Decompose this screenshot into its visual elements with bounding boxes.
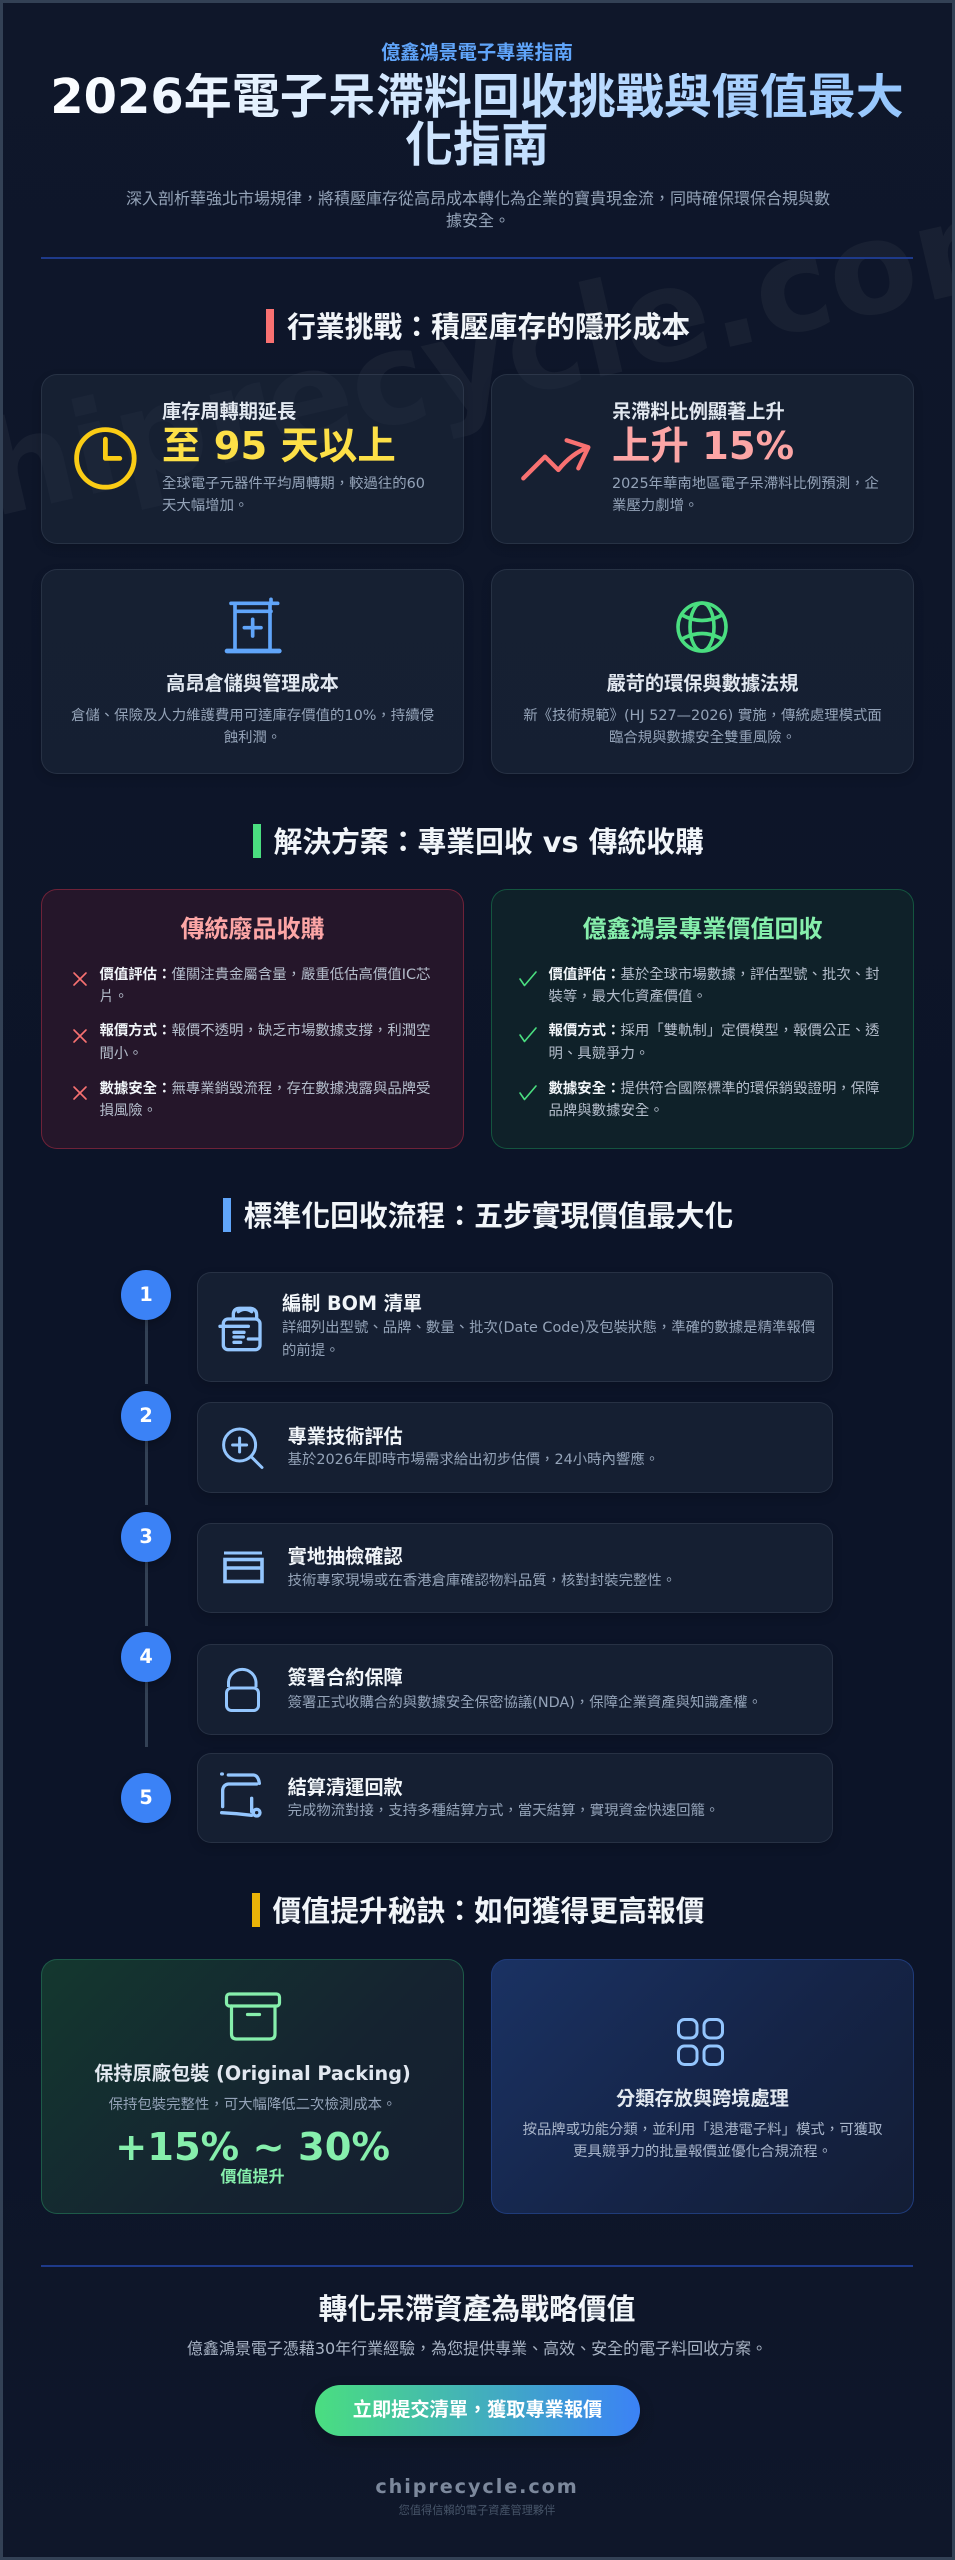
step card [197, 1402, 833, 1493]
panel: original packing [41, 1959, 464, 2214]
description [612, 476, 879, 514]
number 3 [121, 1512, 171, 1562]
heading: solution: 解決方案：專業回收 vs 傳統收購 [274, 825, 704, 859]
main title [41, 73, 913, 169]
step 2 [121, 1391, 833, 1505]
number 2: 2 [139, 1404, 153, 1427]
description: 的前提。 [282, 1343, 340, 1359]
main title: 化指南 [405, 117, 549, 173]
description: 全球電子元器件平均周轉期，較過往的60 [162, 476, 425, 492]
heading: process: 標準化回收流程：五步實現價值最大化 [244, 1199, 733, 1233]
icon: clipboard [218, 1306, 262, 1352]
title: 實地抽檢確認 [288, 1545, 403, 1568]
card: regulations [491, 569, 914, 774]
number 4 [121, 1632, 171, 1682]
title: 保持原廠包裝 (Original Packing) [94, 2062, 411, 2084]
title: 專業技術評估 [288, 1425, 403, 1448]
title: 高昂倉儲與管理成本 [166, 672, 339, 695]
button: 立即提交清單，獲取專業報價 [353, 2398, 602, 2421]
step card [197, 1753, 833, 1843]
description: 業壓力劇增。 [612, 498, 698, 514]
item: quote: 報價方式：採用「雙軌制」定價模型，報價公正、透 [548, 1023, 880, 1039]
number 4: 4 [139, 1645, 153, 1668]
step card [197, 1644, 833, 1735]
item: quote [519, 1022, 880, 1062]
item: quote: 明、具競爭力。 [548, 1046, 649, 1062]
icon: clock [74, 427, 137, 490]
card: dead stock ratio [491, 374, 914, 544]
description: 基於2026年即時市場需求給出初步估價，24小時內響應。 [288, 1452, 659, 1468]
description: 簽署正式收購合約與數據安全保密協議(NDA)，保障企業資產與知識產權。 [288, 1695, 762, 1711]
step card [197, 1523, 833, 1613]
icon: storage tray [223, 1552, 264, 1584]
number 1 [121, 1270, 171, 1320]
title: 編制 BOM 清單 [282, 1292, 422, 1315]
stat: +15% ~ 30% [115, 2125, 390, 2170]
description: 倉儲、保險及人力維護費用可達庫存價值的10%，持續侵 [71, 708, 434, 724]
site name: chiprecycle.com [375, 2475, 579, 2498]
icon: trending arrow [521, 438, 590, 480]
closing section [187, 2292, 767, 2517]
icon: lock [225, 1668, 260, 1712]
label: 呆滯料比例顯著上升 [612, 400, 785, 423]
item: quote [73, 1022, 431, 1062]
item: value: 價值評估：僅關注貴金屬含量，嚴重低估高價值IC芯 [100, 966, 430, 982]
step 4 [121, 1632, 833, 1747]
number 5 [121, 1773, 171, 1823]
closing title: 轉化呆滯資產為戰略價值 [319, 2292, 635, 2326]
description: 天大幅增加。 [162, 498, 248, 514]
description [523, 708, 882, 746]
description: 2025年華南地區電子呆滯料比例預測，企 [612, 476, 879, 492]
description [71, 708, 434, 746]
main title: 2026年電子呆滯料回收挑戰與價值最大 [50, 69, 904, 125]
description: 更具競爭力的批量報價並優化合規流程。 [573, 2144, 832, 2160]
description: 技術專家現場或在香港倉庫確認物料品質，核對封裝完整性。 [288, 1573, 676, 1589]
description: 蝕利潤。 [224, 730, 281, 746]
subtitle: 據安全。 [446, 211, 510, 230]
heading: challenges: 行業挑戰：積壓庫存的隱形成本 [287, 310, 690, 344]
item: data security: 數據安全：無專業銷毀流程，存在數據洩露與品牌受 [100, 1081, 431, 1097]
title: 簽署合約保障 [288, 1666, 403, 1689]
item: value: 片。 [100, 989, 128, 1005]
description [162, 476, 425, 514]
item: value [73, 966, 430, 1005]
icon: payment scroll [220, 1772, 262, 1818]
item: value: 價值評估：基於全球市場數據，評估型號、批次、封 [548, 966, 880, 982]
step card [197, 1272, 833, 1382]
item: data security [73, 1080, 431, 1119]
description: 臨合規與數據安全雙重風險。 [609, 730, 796, 746]
stat: 上升 15% [612, 424, 794, 469]
heading: value tips: 價值提升秘訣：如何獲得更高報價 [272, 1894, 704, 1928]
description [523, 2122, 882, 2160]
icon: grid [677, 2018, 724, 2066]
description: 新《技術規範》(HJ 527—2026) 實施，傳統處理模式面 [523, 708, 882, 724]
title: 結算清運回款 [288, 1776, 403, 1799]
subtitle [126, 189, 830, 230]
closing text: 億鑫鴻景電子憑藉30年行業經驗，為您提供專業、高效、安全的電子料回收方案。 [187, 2339, 767, 2358]
stat: 至 95 天以上 [162, 424, 396, 469]
header [50, 41, 904, 230]
item: data security: 數據安全：提供符合國際標準的環保銷毀證明，保障 [548, 1081, 880, 1097]
title: 分類存放與跨境處理 [616, 2087, 789, 2110]
panel title: 傳統廢品收購 [180, 915, 324, 943]
description: 詳細列出型號、品牌、數量、批次(Date Code)及包裝狀態，準確的數據是精準報價 [282, 1320, 815, 1336]
card: storage cost [41, 569, 464, 774]
description: 完成物流對接，支持多種結算方式，當天結算，實現資金快速回籠。 [288, 1803, 719, 1819]
icon: globe [676, 601, 728, 653]
description [282, 1320, 815, 1359]
step 5 [121, 1753, 833, 1843]
step 3 [121, 1512, 833, 1626]
panel: classification [491, 1959, 914, 2214]
label: 庫存周轉期延長 [162, 400, 296, 423]
number 3: 3 [139, 1525, 153, 1548]
eyebrow: 億鑫鴻景電子專業指南 [381, 41, 573, 64]
item: data security: 損風險。 [100, 1103, 157, 1119]
number 5: 5 [139, 1786, 153, 1809]
button [315, 2385, 640, 2436]
card: inventory turnover [41, 374, 464, 544]
title: 嚴苛的環保與數據法規 [607, 672, 798, 695]
description: 保持包裝完整性，可大幅降低二次檢測成本。 [109, 2097, 396, 2113]
item: quote: 報價方式：報價不透明，缺乏市場數據支撐，利潤空 [100, 1023, 431, 1039]
stat caption: 價值提升 [220, 2167, 284, 2186]
description: 按品牌或功能分類，並利用「退港電子料」模式，可獲取 [523, 2122, 882, 2138]
panel: traditional recycling [41, 889, 464, 1149]
panel title: 億鑫鴻景專業價值回收 [582, 915, 822, 943]
icon: storage [224, 598, 282, 654]
item: quote: 間小。 [100, 1046, 143, 1062]
icon: magnifier [222, 1428, 264, 1470]
number 2 [121, 1391, 171, 1441]
item: value [519, 966, 880, 1005]
tagline: 您值得信賴的電子資產管理夥伴 [399, 2504, 555, 2517]
subtitle: 深入剖析華強北市場規律，將積壓庫存從高昂成本轉化為企業的寶貴現金流，同時確保環保合規與數 [126, 189, 830, 208]
item: data security: 品牌與數據安全。 [548, 1103, 664, 1119]
panel: professional recycling [491, 889, 914, 1149]
number 1: 1 [139, 1283, 153, 1306]
icon: box [224, 1992, 282, 2041]
step 1 [121, 1270, 833, 1384]
item: data security [519, 1080, 880, 1119]
item: value: 裝等，最大化資產價值。 [548, 989, 707, 1005]
